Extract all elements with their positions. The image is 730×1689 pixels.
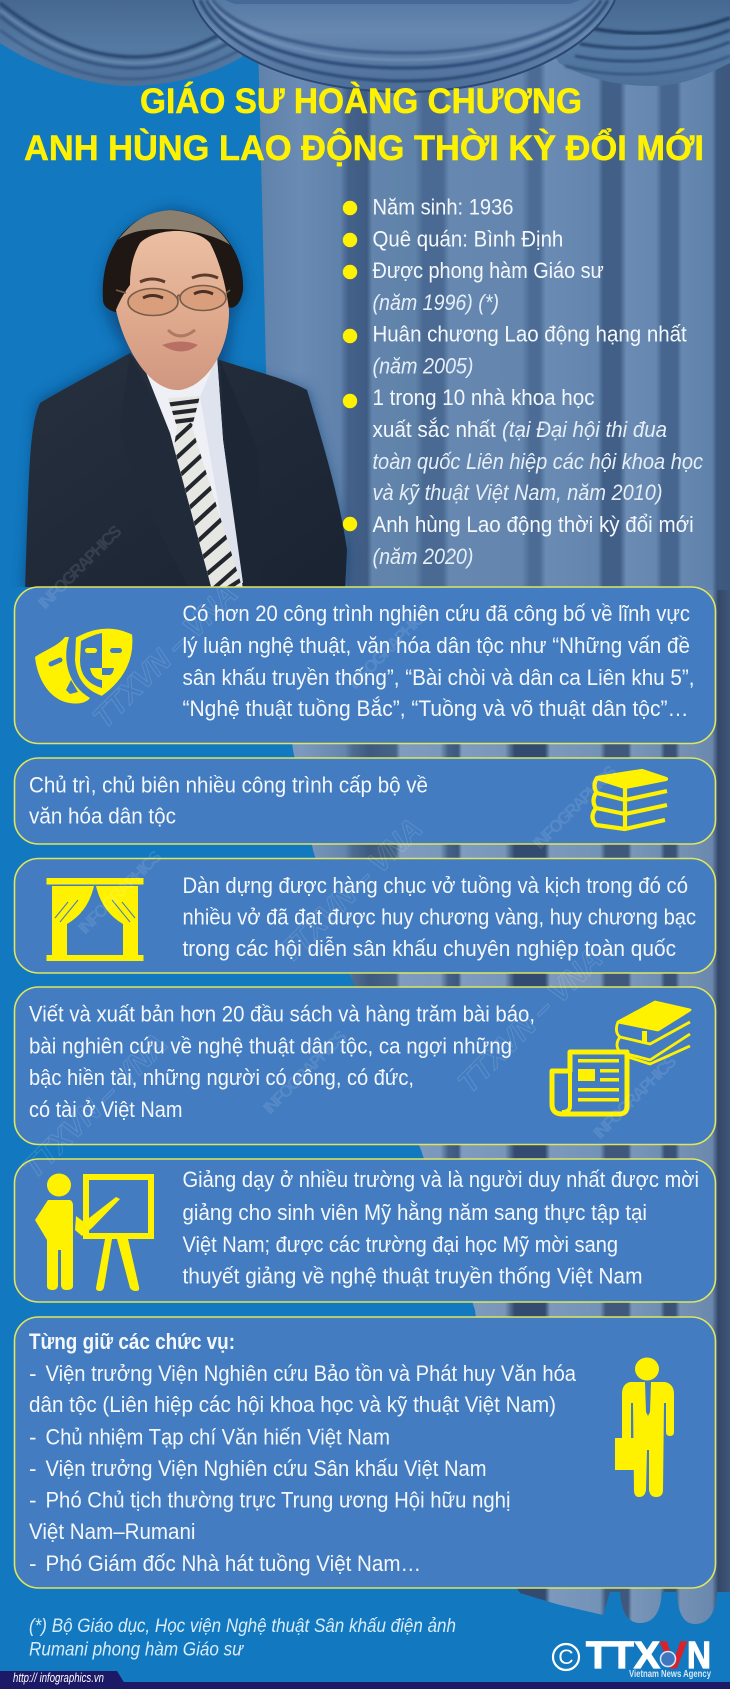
panel: publications: có tài ở Việt Nam [29,1097,182,1122]
footnote: (*) Bộ Giáo dục, Học viện Nghệ thuật Sân khấu điện ảnh [29,1616,456,1637]
panel: research works: sân khấu truyền thống”, “Bài chòi và dân ca Liên khu 5”, [182,665,694,690]
icon: stack of books [592,771,667,829]
watermarks [17,522,681,1185]
panel: research works: “Nghệ thuật tuồng Bắc”, “Tuồng và võ thuật dân tộc”… [182,696,688,721]
panel: positions held: Viện trưởng Viện Nghiên cứu Sân khấu Việt Nam [46,1456,486,1481]
curtain valance drapes [0,0,730,92]
panel: positions held: Phó Chủ tịch thường trực Trung ương Hội hữu nghị [46,1488,510,1512]
watermarks: INFOGRAPHICS [589,1052,681,1143]
list: key facts: Được phong hàm Giáo sư [372,258,604,283]
panel: positions held: Chủ nhiệm Tạp chí Văn hiến Việt Nam [46,1424,390,1450]
icon: teacher at board [35,1174,154,1291]
panel: positions held: - [29,1488,36,1512]
logo: TTXVN: C [558,1646,574,1669]
panel: positions held: Việt Nam–Rumani [29,1519,196,1544]
watermarks: TTXVN – VNA [87,577,244,735]
panel: publications: bài nghiên cứu về nghệ thuật dân tộc, ca ngợi những [29,1034,512,1058]
panel: stage productions: trong các hội diễn sân khấu chuyên nghiệp toàn quốc [182,936,676,961]
footnote [29,1616,456,1660]
panel: teaching: thuyết giảng về nghệ thuật truyền thống Việt Nam [182,1264,642,1288]
list: key facts: (tại Đại hội thi đua [502,417,667,442]
logo: TTXVN: TTX [586,1635,661,1677]
list: key facts: xuất sắc nhất [372,417,496,442]
panel: publications: Viết và xuất bản hơn 20 đầu sách và hàng trăm bài báo, [29,1002,535,1026]
list: key facts: (năm 2005) [372,354,474,378]
icon: stage curtain [46,878,144,961]
watermarks: INFOGRAPHICS [344,602,436,693]
portrait photo [25,210,347,592]
list: key facts [343,194,703,569]
logo: TTXVN: V [660,1635,688,1677]
list: key facts: Quê quán: Bình Định [372,226,563,252]
watermarks: TTXVN – VNA [17,1027,174,1185]
bullet markers [343,201,357,531]
panel: positions held: Viện trưởng Viện Nghiên cứu Bảo tồn và Phát huy Văn hóa [46,1361,576,1386]
watermarks: INFOGRAPHICS [34,522,126,613]
logo: TTXVN [553,1635,711,1680]
list: key facts: 1 trong 10 nhà khoa học [372,385,594,410]
panel: stage productions [14,858,716,973]
list: key facts: và kỹ thuật Việt Nam, năm 2010) [372,480,662,505]
watermarks: INFOGRAPHICS [74,847,166,938]
panel: ministerial projects: văn hóa dân tộc [29,804,176,828]
title [24,81,704,168]
logo: TTXVN: N [687,1635,711,1677]
panel: research works [14,587,716,744]
list: key facts: Huân chương Lao động hạng nhất [372,322,687,346]
panel: ministerial projects [14,758,716,844]
panel: positions held: dân tộc (Liên hiệp các hội khoa học và kỹ thuật Việt Nam) [29,1392,556,1417]
panel: ministerial projects: Chủ trì, chủ biên nhiều công trình cấp bộ về [29,772,428,798]
panel: teaching: giảng cho sinh viên Mỹ hằng năm sang thực tập tại [182,1200,647,1225]
panel: positions held: - [29,1361,36,1386]
watermarks: TTXVN – VNA [452,942,609,1100]
watermarks: INFOGRAPHICS [259,1027,351,1118]
panel: teaching [14,1159,716,1302]
icon: newspaper and books [552,1002,690,1114]
title: GIÁO SƯ HOÀNG CHƯƠNG [140,81,582,121]
stage curtain backdrop [258,40,730,1624]
watermarks: TTXVN – VNA [272,812,429,970]
watermarks: INFOGRAPHICS [529,762,621,853]
footer bar: http:// infographics.vn [13,1670,104,1685]
panel: positions held: - [29,1456,36,1481]
icon: theatre masks [35,628,133,704]
panel: positions held: Phó Giám đốc Nhà hát tuồng Việt Nam… [46,1551,421,1576]
panel: positions held: - [29,1551,36,1576]
panel: publications [14,987,716,1144]
title: ANH HÙNG LAO ĐỘNG THỜI KỲ ĐỔI MỚI [24,128,704,168]
panel: positions held: Từng giữ các chức vụ: [29,1329,235,1354]
panel: positions held: - [29,1424,36,1450]
panel: publications: bậc hiền tài, những người có công, có đức, [29,1065,414,1090]
list: key facts: (năm 1996) (*) [372,290,499,315]
panel: teaching: Việt Nam; được các trường đại học Mỹ mời sang [182,1232,618,1257]
list: key facts: (năm 2020) [372,544,474,569]
list: key facts: Năm sinh: 1936 [372,194,514,220]
panel: stage productions: Dàn dựng được hàng chục vở tuồng và kịch trong đó có [182,873,688,898]
panel: positions held [14,1317,716,1588]
list: key facts: Anh hùng Lao động thời kỳ đổi mới [372,512,694,537]
panel: research works: lý luận nghệ thuật, văn hóa dân tộc như “Những vấn đề [182,633,690,658]
footer bar [0,1670,730,1689]
icon: businessman with briefcase [615,1358,674,1497]
footnote: Rumani phong hàm Giáo sư [29,1640,245,1660]
